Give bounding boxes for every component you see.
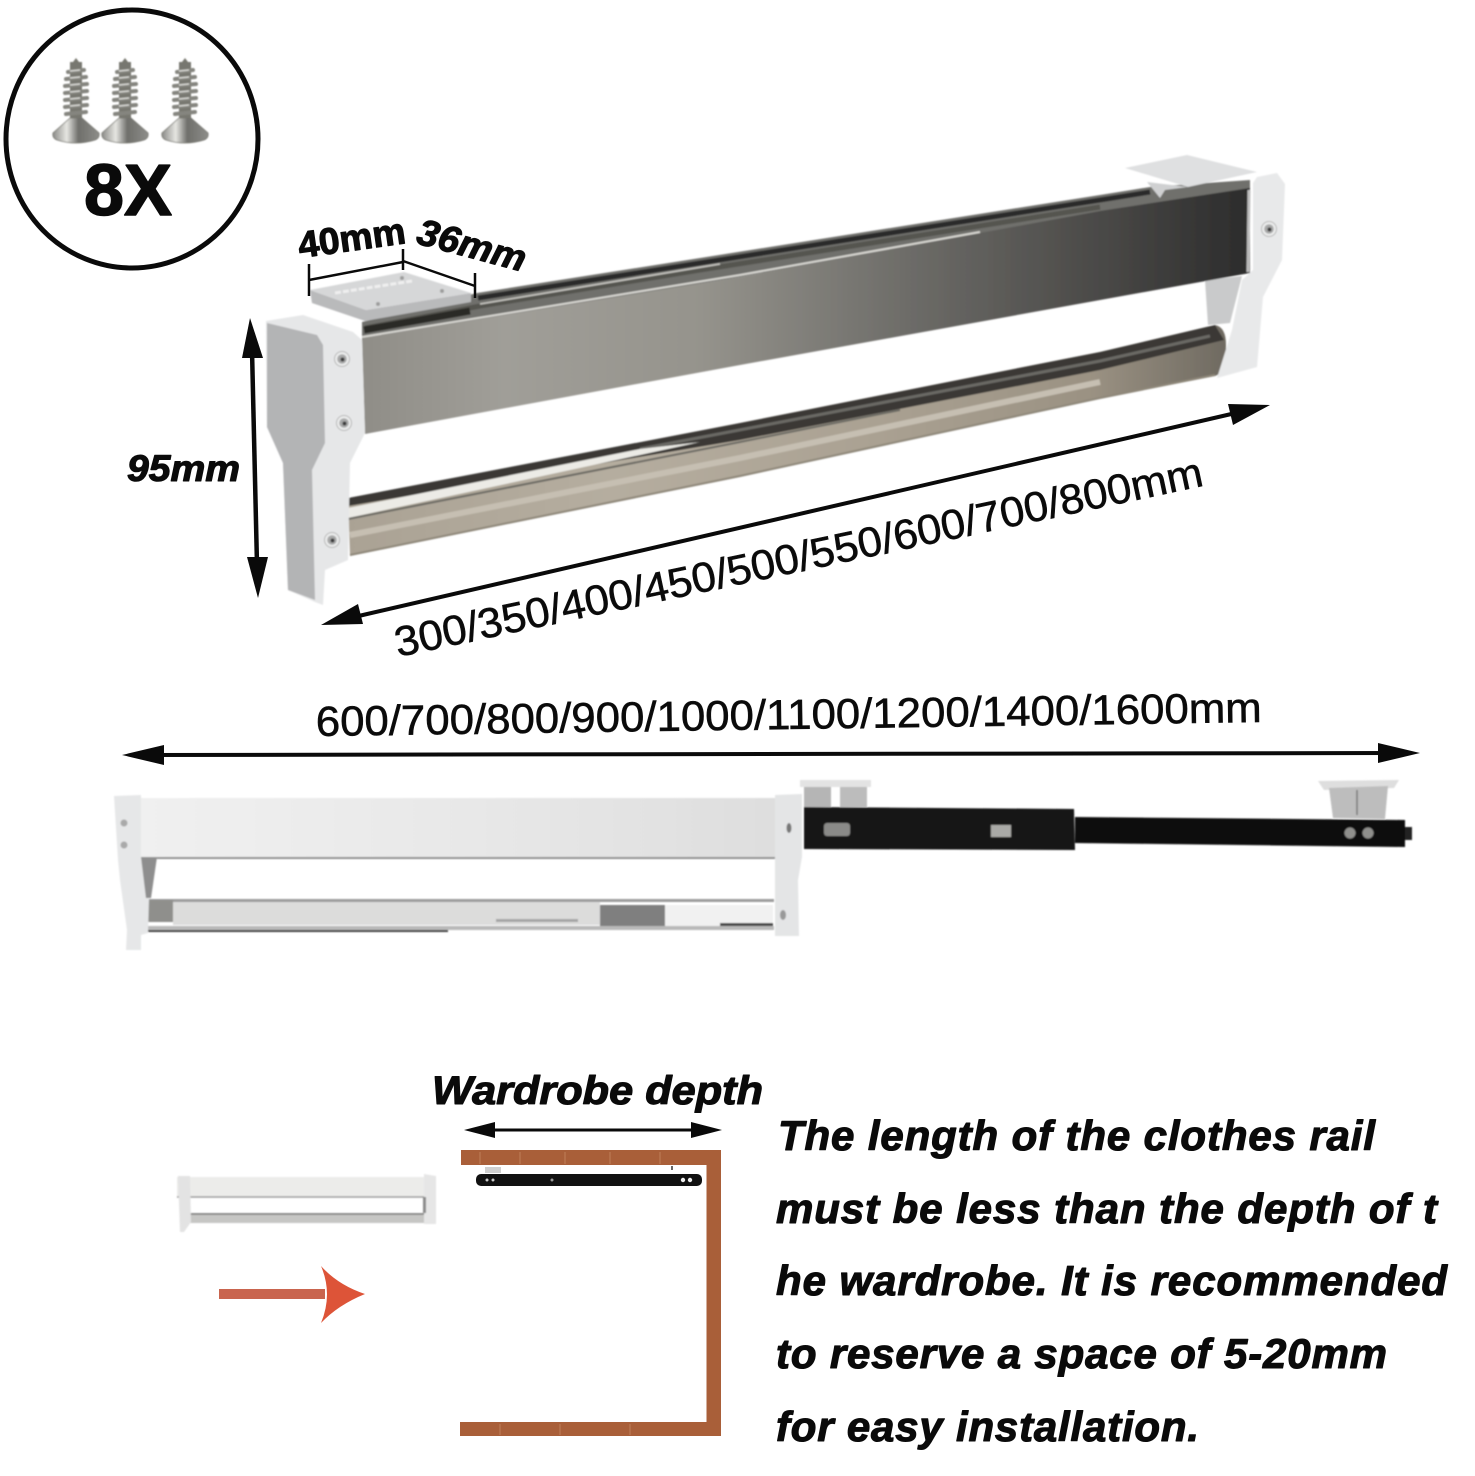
height arrow (242, 318, 268, 598)
badge ring (6, 10, 258, 268)
plate dimension lines (309, 249, 475, 298)
dimension: extended length (122, 684, 1420, 765)
extended length values: 600/700/800/900/1000/1100/1200/1400/1600mm (315, 684, 1262, 745)
drawer slide (804, 807, 1412, 850)
dimension: 40mm by 36mm plate (295, 210, 531, 298)
right side bracket (775, 794, 802, 936)
text block: installation note: to reserve a space of 5-20mm (776, 1330, 1387, 1377)
far bracket rear leg (1205, 276, 1242, 325)
dimension: 95mm height (127, 318, 268, 598)
text block: installation note (776, 1112, 1448, 1450)
text block: installation note: he wardrobe. It is recommended (776, 1257, 1448, 1304)
label 95mm: 95mm (127, 448, 240, 489)
rail front panel (362, 188, 1250, 434)
heading wardrobe depth: Wardrobe depth (432, 1069, 763, 1113)
rail length values: 300/350/400/450/500/550/600/700/800mm (390, 448, 1207, 666)
left bracket (266, 315, 365, 605)
panel: screw count badge (6, 10, 258, 268)
slide bracket far (1318, 780, 1399, 819)
small rail (177, 1174, 436, 1232)
side view rod (148, 899, 774, 932)
label 36mm: 36mm (413, 211, 531, 279)
chrome top strip (362, 180, 1250, 340)
mini drawer slide (476, 1166, 702, 1186)
mounting plate near (310, 272, 471, 321)
screw quantity: 8X (84, 151, 172, 231)
red arrow (219, 1266, 365, 1323)
extended length arrow (122, 743, 1420, 765)
hanging rod (348, 325, 1226, 556)
icon: three screws (53, 58, 208, 143)
wardrobe cabinet outline (460, 1150, 721, 1436)
panel: main rail product view (266, 155, 1285, 605)
panel right chrome edge (1248, 190, 1249, 272)
depth arrow (464, 1122, 722, 1138)
left side bracket (114, 795, 157, 950)
label 40mm: 40mm (295, 210, 408, 266)
rail length arrow (321, 404, 1270, 625)
white rail panel (141, 798, 775, 858)
dimension: rail length (321, 404, 1270, 666)
text block: installation note: for easy installation. (776, 1403, 1199, 1450)
right bracket (1217, 173, 1285, 378)
panel: wardrobe installation diagram (177, 1069, 763, 1436)
text block: installation note: The length of the clothes rail (778, 1112, 1376, 1159)
panel: extended rail side view (114, 780, 1412, 950)
mounting plate far (1125, 155, 1257, 198)
slide bracket near (800, 780, 871, 807)
text block: installation note: must be less than the depth of t (776, 1185, 1439, 1232)
panel top highlight (362, 232, 980, 337)
